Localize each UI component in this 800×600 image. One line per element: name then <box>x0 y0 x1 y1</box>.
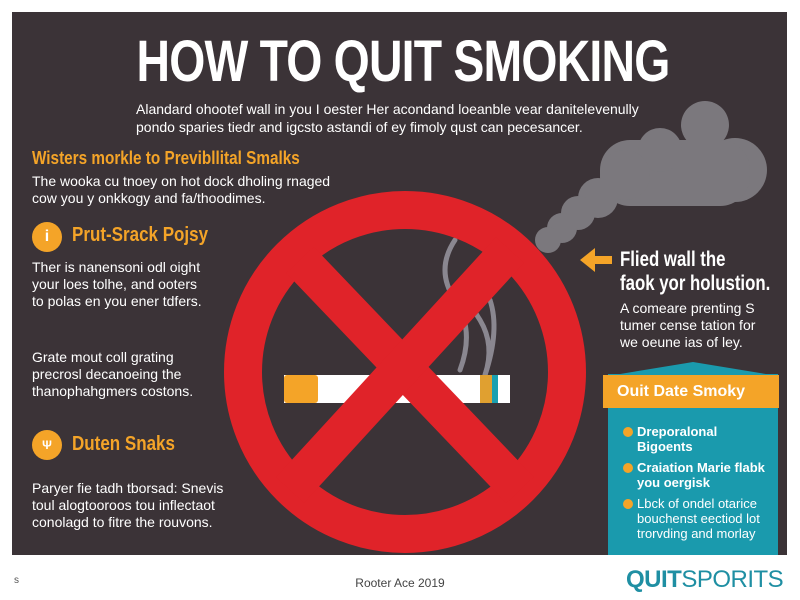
intro text: Alandard ohootef wall in you I oester Her acondand loeanble vear danitelevenully pondo sparies tiedr and igcsto astandi of ey fimoly qust can pecesancer. <box>136 101 639 135</box>
section 1 text: The wooka cu tnoey on hot dock dholing rnaged cow you y onkkogy and fa/thoodimes. <box>32 173 330 206</box>
teal box list: Lbck of ondel otarice bouchenst eectiod lot trorvding and morlay <box>637 496 760 541</box>
section 1 heading: Wisters morkle to Previbllital Smalks <box>32 148 300 168</box>
smoke wisps <box>445 240 494 375</box>
callout heading: Flied wall the <box>620 248 725 271</box>
callout heading <box>620 248 770 295</box>
prohibition sign <box>243 210 567 534</box>
section 4 icon <box>32 430 62 460</box>
section 2 heading: Prut-Srack Pojsy <box>72 224 208 246</box>
section 4 text: Paryer fie tadh tborsad: Snevis toul alogtooroos tou inflectaot conolagd to fitre the rouvons. <box>32 480 223 530</box>
callout text: A comeare prenting S tumer cense tation for we oeune ias of ley. <box>620 300 755 350</box>
section 4 icon: Ψ <box>42 438 52 452</box>
footer center: Rooter Ace 2019 <box>355 576 445 590</box>
section 4 heading: Duten Snaks <box>72 433 175 455</box>
callout right <box>620 248 770 350</box>
teal box header <box>603 375 779 408</box>
section 3 text: Grate mout coll grating precrosl decanoeing the thanophahgmers costons. <box>32 349 193 399</box>
teal box list: Dreporalonal Bigoents <box>637 424 717 454</box>
cigarette <box>284 375 510 403</box>
teal box list: Craiation Marie flabk you oergisk <box>637 460 765 490</box>
title: HOW TO QUIT SMOKING <box>136 29 670 94</box>
callout heading: faok yor holustion. <box>620 272 770 295</box>
arrow <box>580 248 612 272</box>
section 2 icon <box>32 222 62 252</box>
teal box: quit date <box>603 362 779 555</box>
teal box header: Ouit Date Smoky <box>617 383 745 400</box>
footer logo: QUITSPORITS <box>626 566 783 593</box>
teal box list <box>623 424 765 541</box>
smoke cloud <box>535 101 767 253</box>
section 2 icon: i <box>45 228 49 245</box>
section 2 text: Ther is nanensoni odl oight your loes tolhe, and ooters to polas en you ener tdfers. <box>32 259 202 309</box>
footer left mark: s <box>14 575 19 586</box>
